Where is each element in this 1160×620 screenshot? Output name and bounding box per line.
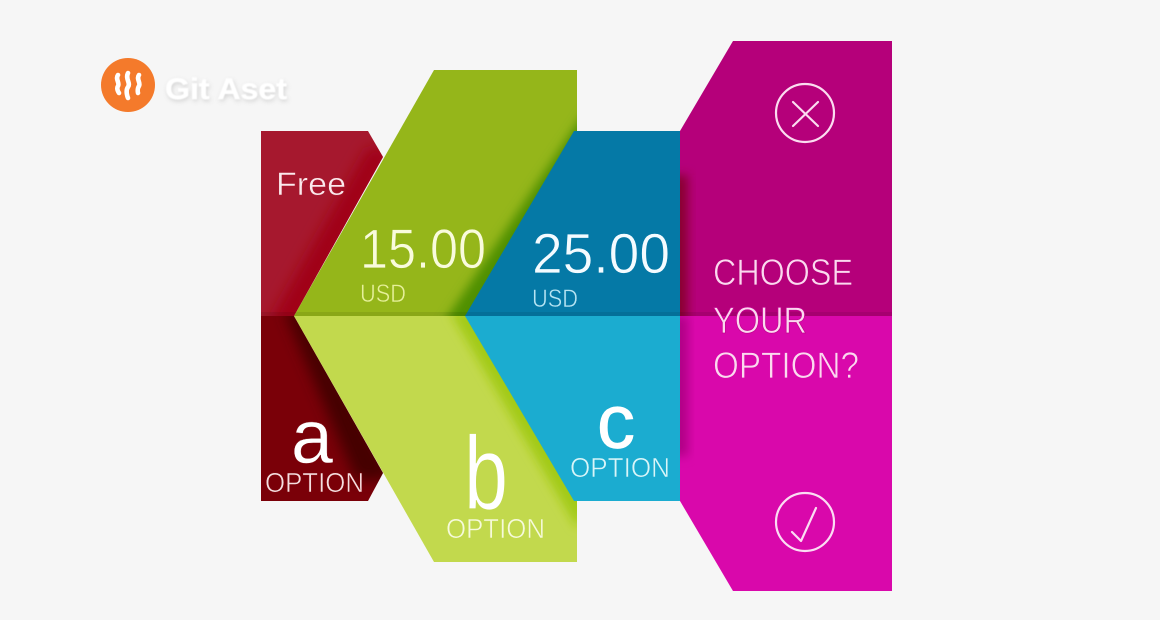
- icon: cross in circle: [776, 84, 834, 142]
- label: Free: Free: [276, 166, 346, 202]
- label: USD: USD: [360, 280, 406, 308]
- panel: dark red lower option a: [261, 316, 383, 501]
- panel: bright magenta lower: [672, 316, 892, 591]
- icon: orange logo badge: [101, 58, 155, 112]
- logo wordmark: Git Aset: [166, 75, 288, 108]
- price: 25.00: 25.00: [532, 222, 670, 286]
- panel: cyan lower option c: [465, 316, 680, 501]
- panel: blue upper 25.00: [465, 131, 680, 316]
- panel: red upper Free: [261, 131, 383, 316]
- panel: magenta upper: [668, 41, 892, 325]
- heading: CHOOSE YOUR OPTION?: [713, 252, 859, 386]
- heading: CHOOSE YOUR OPTION?: YOUR: [713, 300, 807, 341]
- heading: CHOOSE YOUR OPTION?: OPTION?: [713, 345, 859, 386]
- logo: Git Aset: [101, 58, 288, 112]
- infographic canvas: [101, 41, 892, 591]
- label: OPTION c: OPTION: [570, 452, 670, 483]
- fold line shadow: [261, 312, 892, 316]
- panel: light green lower option b: [294, 312, 590, 562]
- label: OPTION a: OPTION: [265, 467, 364, 498]
- letter b: b: [464, 416, 508, 532]
- heading: CHOOSE YOUR OPTION?: CHOOSE: [713, 252, 853, 293]
- panel: green upper 15.00: [294, 70, 577, 316]
- letter c: c: [597, 380, 635, 465]
- label: OPTION b: OPTION: [446, 513, 545, 544]
- icon: check in circle: [776, 493, 834, 551]
- price: 15.00: 15.00: [360, 217, 486, 280]
- letter a: a: [291, 395, 334, 480]
- label: USD: USD: [532, 285, 578, 313]
- logo wordmark: Git Aset: [165, 73, 287, 106]
